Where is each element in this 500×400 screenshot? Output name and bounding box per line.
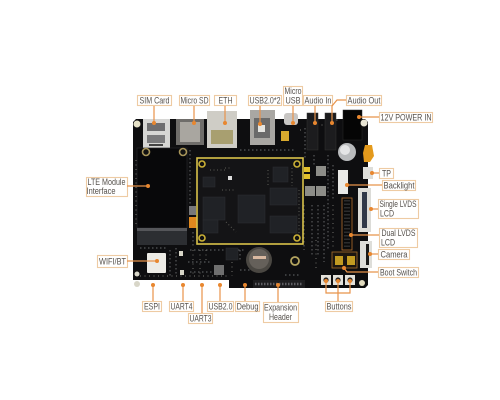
- mounting hole bottom right: [359, 280, 365, 286]
- yellow capacitors: [304, 167, 310, 179]
- label: UART3: [188, 283, 212, 324]
- label: USB2.0: [208, 283, 234, 312]
- label: Expansion Header: [264, 283, 298, 322]
- label: Micro SD: Micro SD: [180, 96, 209, 106]
- coin battery: [246, 247, 272, 273]
- label: Debug: [236, 283, 260, 312]
- label: SIM Card: [138, 96, 172, 125]
- board body: [133, 119, 368, 288]
- white TP connector: [363, 167, 373, 179]
- Micro USB connector: [284, 113, 298, 125]
- label: Micro SD: [180, 96, 210, 125]
- label: Audio Out: [330, 96, 382, 125]
- label: UART3: UART3: [190, 314, 212, 324]
- push buttons: [321, 275, 355, 285]
- core module with gold border: [197, 158, 303, 244]
- orange connector: [363, 145, 374, 162]
- label: Audio In: Audio In: [304, 96, 332, 106]
- label: LTE Module Interface: [86, 177, 150, 196]
- label: WIFI/BT: [98, 256, 159, 268]
- label: Backlight: [345, 180, 416, 190]
- label: Single LVDS LCD: [369, 199, 418, 218]
- label: ESPI: [142, 283, 162, 312]
- LTE module interface area: [137, 148, 187, 245]
- ETH connector: [207, 111, 237, 148]
- WIFI/BT module: [147, 253, 166, 273]
- label: Micro USB: Micro: [284, 86, 302, 96]
- label: Camera: Camera: [380, 250, 408, 260]
- Micro SD slot: [176, 119, 204, 145]
- white small parts: [134, 251, 184, 287]
- label: Boot Switch: [342, 266, 418, 278]
- label: ETH: [214, 96, 236, 125]
- label: TP: [370, 168, 394, 178]
- mounting hole top left: [134, 120, 140, 128]
- gold component near USB: [281, 131, 289, 141]
- label: Buttons: [324, 279, 352, 312]
- label: Expansion Header: Expansion: [264, 302, 297, 312]
- label: USB2.0*2: [248, 96, 282, 126]
- label: UART4: UART4: [170, 302, 192, 312]
- label: Audio Out: Audio Out: [348, 96, 381, 106]
- label: Dual LVDS LCD: [349, 228, 418, 248]
- label: Audio In: [304, 96, 332, 125]
- label: Micro USB: [284, 86, 302, 125]
- label: Dual LVDS LCD: Dual LVDS: [382, 228, 416, 238]
- label: LTE Module Interface: LTE Module: [88, 177, 126, 187]
- Audio In jack: [307, 113, 318, 150]
- label: Micro USB: USB: [286, 96, 300, 106]
- label: LTE Module Interface: Interface: [86, 186, 116, 196]
- expansion header: [253, 280, 305, 288]
- inductor lower left: [214, 265, 224, 275]
- power hole: [360, 120, 368, 126]
- label: Single LVDS LCD: Single LVDS: [380, 199, 416, 209]
- label: 12V POWER IN: [357, 112, 432, 122]
- Camera connector: [360, 241, 372, 268]
- SIM card slot: [143, 119, 170, 148]
- black chip lower: [226, 248, 238, 260]
- inductors: [305, 166, 326, 196]
- Dual LVDS pin header: [342, 198, 352, 250]
- USB connector: [250, 110, 275, 145]
- label: USB2.0*2: USB2.0*2: [250, 96, 280, 106]
- label: TP: TP: [382, 168, 391, 178]
- Audio Out jack: [325, 113, 336, 150]
- label: SIM Card: SIM Card: [140, 96, 170, 106]
- label: ESPI: ESPI: [144, 302, 160, 312]
- label: Camera: [368, 250, 410, 260]
- label: 12V POWER IN: 12V POWER IN: [380, 112, 432, 122]
- label: Boot Switch: Boot Switch: [380, 268, 417, 278]
- Backlight connector: [338, 170, 348, 194]
- label: Single LVDS LCD: LCD: [380, 208, 394, 218]
- capacitor: [338, 143, 356, 161]
- label: USB2.0: USB2.0: [208, 302, 232, 312]
- label: Buttons: Buttons: [326, 302, 352, 312]
- label: Debug: Debug: [236, 302, 258, 312]
- power jack: [343, 110, 362, 140]
- label: WIFI/BT: WIFI/BT: [99, 256, 126, 266]
- label: Expansion Header: Header: [269, 312, 292, 322]
- Single LVDS connector: [358, 188, 371, 232]
- label: ETH: ETH: [218, 96, 232, 106]
- orange capacitor stack: [189, 206, 197, 228]
- boot switch: [332, 252, 357, 268]
- label: UART4: [170, 283, 194, 312]
- circuit board: [133, 110, 374, 288]
- label: Dual LVDS LCD: LCD: [381, 238, 395, 248]
- gold mounting hole: [291, 257, 299, 265]
- small surface-mount parts: [136, 120, 340, 276]
- label: Backlight: Backlight: [384, 180, 415, 190]
